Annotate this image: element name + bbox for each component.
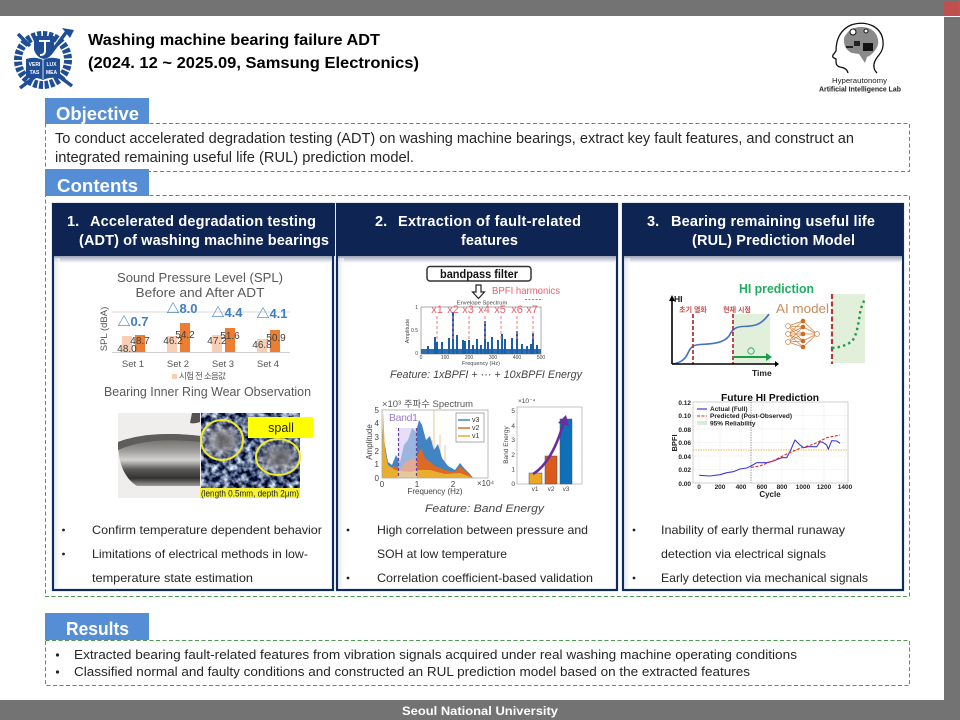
frequency spectrum chart: v2 xyxy=(472,425,480,432)
icon: Seoul National University emblem: LUX xyxy=(46,62,57,68)
icon: lab logo: Hyperautonomy xyxy=(832,76,887,85)
future HI prediction chart: 1000 xyxy=(796,484,811,491)
title: Washing machine bearing failure ADT xyxy=(88,32,380,49)
panel 1 header: (ADT) of washing machine bearings xyxy=(79,233,329,249)
SPL bar chart xyxy=(99,270,290,381)
heading: objective: Objective xyxy=(56,104,139,124)
icon: lab logo xyxy=(819,23,902,94)
future HI prediction chart: 95% Reliability xyxy=(710,420,756,428)
future HI prediction chart: 1400 xyxy=(838,484,853,491)
SPL bar chart: Set 1 xyxy=(122,359,144,370)
envelope spectrum chart: Amplitude xyxy=(405,319,411,343)
top bar xyxy=(0,0,960,16)
panel 3 header xyxy=(622,203,903,256)
future HI prediction chart: Future HI Prediction xyxy=(721,393,819,404)
envelope spectrum chart: 500 xyxy=(537,355,545,361)
bearing photo xyxy=(118,413,201,498)
frequency spectrum chart: 2 xyxy=(451,480,456,489)
frequency spectrum chart: 0 xyxy=(380,480,385,489)
SPL chart title: Before and After ADT xyxy=(136,285,265,300)
feature caption 2: Feature: Band Energy xyxy=(425,503,546,515)
panel: results box: Classified normal and faulty conditions and constructed an RUL prediction model based on the extracted features xyxy=(74,664,751,679)
band energy bar chart: v1 xyxy=(532,486,539,493)
panel 1 header xyxy=(52,203,335,256)
wear micrograph with spall marks xyxy=(200,413,313,498)
panel: objective box: To conduct accelerated degradation testing (ADT) on washing machine bearings, extract key fault features, and construct an xyxy=(55,131,854,147)
envelope spectrum chart: x4 xyxy=(478,304,490,316)
AI model network icon xyxy=(776,301,829,349)
icon: Seoul National University emblem: TAS xyxy=(30,70,40,76)
envelope spectrum chart: x7 xyxy=(526,304,538,316)
future HI prediction chart: 0.06 xyxy=(678,440,691,447)
future HI prediction chart: Predicted (Post-Observed) xyxy=(710,413,792,420)
envelope spectrum chart: 0 xyxy=(415,351,418,357)
envelope spectrum chart xyxy=(405,300,545,367)
band energy bar chart: v2 xyxy=(548,486,555,493)
future HI prediction chart: 0.00 xyxy=(678,481,691,488)
future HI prediction chart xyxy=(670,393,853,499)
envelope spectrum chart: 1 xyxy=(415,305,418,311)
future HI prediction chart: 0.12 xyxy=(678,400,691,407)
band energy bar chart: 5 xyxy=(511,408,515,415)
panel: objective box xyxy=(46,124,910,172)
bandpass filter label: bandpass filter xyxy=(440,269,518,281)
HI schematic chart: 초기 열화 xyxy=(679,305,707,314)
envelope spectrum chart: x6 xyxy=(511,304,523,316)
panel: objective box: integrated remaining useful life (RUL) prediction model. xyxy=(55,150,414,166)
SPL bar chart: 48.0 xyxy=(117,344,137,355)
HI schematic chart: Time xyxy=(752,368,772,378)
SPL bar chart: 47.2 xyxy=(207,336,227,347)
SPL bar chart: △4.1 xyxy=(256,306,288,321)
icon: lab logo: Artificial Intelligence Lab xyxy=(819,84,902,94)
SPL bar chart: △4.4 xyxy=(211,305,243,320)
frequency spectrum chart: 1 xyxy=(415,480,420,489)
SPL bar chart: 48.7 xyxy=(130,336,150,347)
icon: Seoul National University emblem: VERI xyxy=(29,62,41,68)
panel 1: accelerated degradation testing xyxy=(52,203,335,590)
panel 2 bullets xyxy=(347,523,593,585)
future HI prediction chart: 200 xyxy=(715,484,726,491)
panel 3 bullets: detection via electrical signals xyxy=(661,547,826,561)
band energy bar chart: 0 xyxy=(511,481,515,488)
SPL bar chart: △0.7 xyxy=(117,314,149,329)
band energy bar chart: 1 xyxy=(511,466,515,474)
HI schematic chart xyxy=(669,294,779,378)
predicted HI curve xyxy=(832,294,866,364)
envelope spectrum chart: 400 xyxy=(513,355,521,361)
icon: Seoul National University emblem xyxy=(18,28,74,88)
panel 1 header: Accelerated degradation testing xyxy=(90,214,316,230)
panel 1 header: 1. xyxy=(67,214,79,230)
panel: contents box xyxy=(46,196,910,596)
AI model network icon: AI model xyxy=(776,301,829,316)
future HI prediction chart: 600 xyxy=(757,484,768,491)
panel 2 bullets: SOH at low temperature xyxy=(377,547,507,561)
future HI prediction chart: 400 xyxy=(736,484,747,491)
SPL chart title xyxy=(117,270,283,300)
panel 1 bullets: Limitations of electrical methods in low- xyxy=(92,547,308,561)
future HI prediction chart: 0.04 xyxy=(678,454,691,461)
icon: Seoul National University emblem: MEA xyxy=(46,70,57,76)
envelope spectrum chart: x3 xyxy=(462,304,474,316)
frequency spectrum chart: 1 xyxy=(375,460,380,469)
panel: results box: Extracted bearing fault-related features from vibration signals acquired under real washing machine operating conditions xyxy=(74,647,798,662)
bearing wear heading: Bearing Inner Ring Wear Observation xyxy=(104,385,311,399)
frequency spectrum chart: ×10³ 주파수 Spectrum xyxy=(382,399,473,409)
future HI prediction chart: Cycle xyxy=(759,490,781,499)
SPL bar chart: Set 2 xyxy=(167,359,189,370)
panel 2 bullets: High correlation between pressure and xyxy=(377,523,588,537)
frequency spectrum chart: ×10⁴ xyxy=(477,479,495,488)
panel 1 bullets xyxy=(62,523,322,585)
future HI prediction chart: 0.08 xyxy=(678,427,691,434)
panel 3 header: 3. xyxy=(647,214,659,230)
panel 3 header: Bearing remaining useful life xyxy=(671,214,875,230)
frequency spectrum chart xyxy=(365,399,495,496)
band energy bar chart: 3 xyxy=(511,437,515,444)
panel 3 bullets xyxy=(633,523,868,585)
SPL bar chart: 시험 전 소음값 xyxy=(179,371,226,381)
envelope spectrum chart: x1 xyxy=(431,304,443,316)
frequency spectrum chart: 3 xyxy=(375,433,380,442)
band energy bar chart xyxy=(503,398,582,493)
frequency spectrum chart: Band1 xyxy=(389,412,418,424)
envelope spectrum chart: 100 xyxy=(441,355,449,361)
frequency spectrum chart: 0 xyxy=(375,474,380,483)
SPL bar chart: Set 3 xyxy=(212,359,234,370)
BPFI harmonics label: BPFI harmonics xyxy=(492,285,560,297)
envelope spectrum chart: Envelope Spectrum xyxy=(457,300,507,306)
spall dimensions caption: (length 0.5mm, depth 2μm) xyxy=(201,488,299,498)
heading: contents: Contents xyxy=(57,176,138,196)
red corner square xyxy=(944,1,959,16)
future HI prediction chart: 0.02 xyxy=(678,467,691,474)
SPL bar chart: 46.8 xyxy=(252,340,272,351)
SPL bar chart: 54.2 xyxy=(175,330,195,341)
frequency spectrum chart: v3 xyxy=(472,417,480,424)
heading: objective xyxy=(45,98,149,124)
SPL bar chart: △8.0 xyxy=(166,301,198,316)
band energy bar chart: 4 xyxy=(511,423,515,430)
HI schematic chart: HI xyxy=(674,294,682,304)
panel 2 header: Extraction of fault-related xyxy=(398,214,581,230)
panel 2: extraction of fault features xyxy=(336,203,618,590)
HI schematic chart: 현재 시점 xyxy=(723,305,751,314)
band energy bar chart: ×10⁻⁴ xyxy=(518,398,535,405)
panel 3 bullets: Inability of early thermal runaway xyxy=(661,523,845,537)
panel 2 header: features xyxy=(461,233,518,249)
frequency spectrum chart: 4 xyxy=(375,419,380,428)
future HI prediction chart: 1200 xyxy=(817,484,832,491)
future HI prediction chart: Actual (Full) xyxy=(710,406,748,413)
envelope spectrum chart: 0.5 xyxy=(411,328,418,334)
frequency spectrum chart: v1 xyxy=(472,433,480,440)
heading: contents xyxy=(45,169,149,196)
future HI prediction chart: 0 xyxy=(697,484,701,491)
panel 3: RUL prediction model xyxy=(622,203,903,590)
panel 3 header: (RUL) Prediction Model xyxy=(692,233,855,249)
panel 3 bullets: Early detection via mechanical signals xyxy=(661,571,868,585)
heading: results: Results xyxy=(66,619,129,639)
SPL bar chart: 51.6 xyxy=(220,331,240,342)
SPL chart title: Sound Pressure Level (SPL) xyxy=(117,270,283,285)
envelope spectrum chart: 300 xyxy=(489,355,497,361)
band energy bar chart: 2 xyxy=(511,452,515,459)
future HI prediction chart: BPFI xyxy=(670,434,679,452)
frequency spectrum chart: 5 xyxy=(375,406,380,415)
title xyxy=(88,32,419,72)
envelope spectrum chart: 200 xyxy=(465,355,473,361)
band energy bar chart: Band Energy xyxy=(503,425,510,464)
SPL bar chart: Set 4 xyxy=(257,359,279,370)
SPL bar chart: SPL (dBA) xyxy=(99,307,110,351)
frequency spectrum chart: Amplitude xyxy=(365,424,374,460)
bandpass filter label xyxy=(427,266,531,281)
future HI prediction chart: 0.10 xyxy=(678,413,691,420)
panel 1 bullets: temperature state estimation xyxy=(92,571,253,585)
envelope spectrum chart: Frequency (Hz) xyxy=(462,361,500,367)
frequency spectrum chart: Frequency (Hz) xyxy=(407,487,463,496)
panel 2 bullets: Correlation coefficient-based validation xyxy=(377,571,593,585)
footer bar xyxy=(0,700,944,720)
SPL bar chart: 50.9 xyxy=(266,333,286,344)
frequency spectrum chart: 2 xyxy=(375,447,380,456)
right side bar xyxy=(944,17,960,720)
panel 2 header: 2. xyxy=(375,214,387,230)
title: (2024. 12 ~ 2025.09, Samsung Electronics) xyxy=(88,55,419,72)
feature caption 1: Feature: 1xBPFI + ··· + 10xBPFI Energy xyxy=(390,369,583,381)
panel 1 bullets: Confirm temperature dependent behavior xyxy=(92,523,322,537)
envelope spectrum chart: 0 xyxy=(420,355,423,361)
HI prediction heading: HI prediction xyxy=(739,282,814,296)
SPL bar chart: 46.2 xyxy=(163,336,183,347)
panel: results box xyxy=(46,640,910,686)
heading: results xyxy=(45,613,149,640)
spall callout: spall xyxy=(268,421,294,435)
band energy bar chart: v3 xyxy=(563,486,570,493)
panel 2 header xyxy=(336,203,618,256)
footer bar: Seoul National University xyxy=(402,704,558,718)
arrow down xyxy=(472,285,484,298)
future HI prediction chart: 800 xyxy=(777,484,788,491)
envelope spectrum chart: x5 xyxy=(494,304,506,316)
envelope spectrum chart: x2 xyxy=(447,304,459,316)
